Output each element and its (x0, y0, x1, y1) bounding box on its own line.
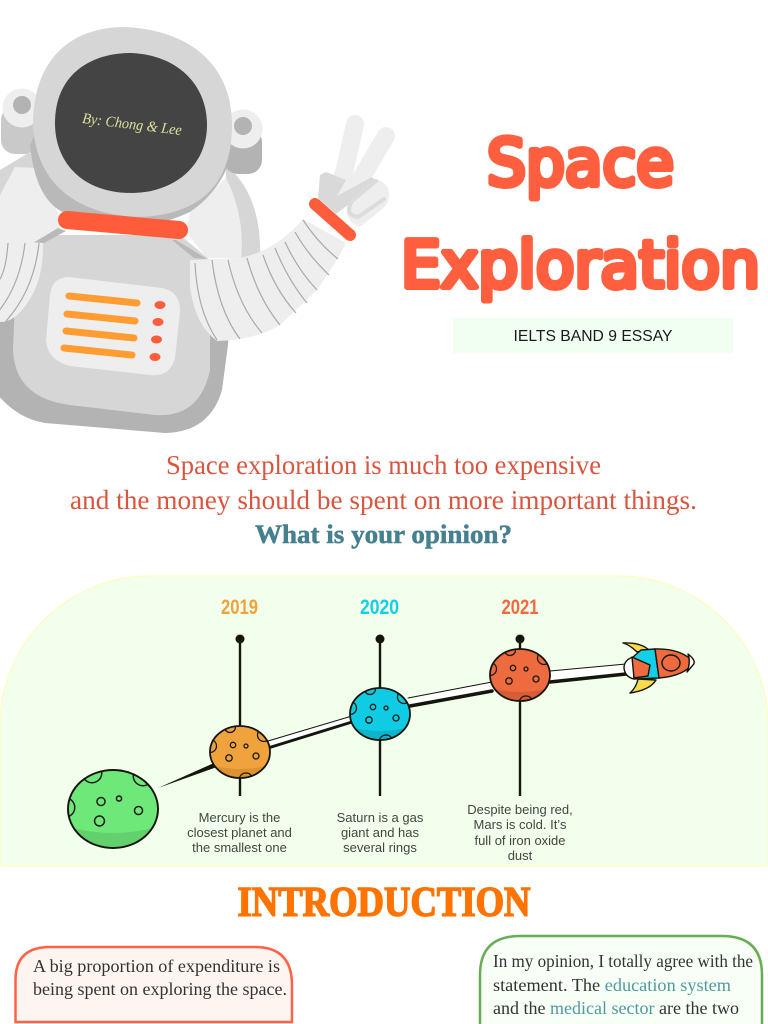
panel: introduction left (16, 947, 292, 1022)
panel: introduction right (480, 936, 762, 1024)
caption: 2019: Mercury is the (199, 810, 280, 825)
astronaut collar (67, 220, 179, 230)
astronaut helmet: By: Chong & Lee (81, 111, 183, 139)
astronaut body (0, 152, 260, 433)
heading: introduction: INTRODUCTION (238, 880, 530, 926)
planet: green (67, 769, 159, 849)
caption: 2020: giant and has (341, 825, 420, 840)
astronaut left arm (0, 240, 43, 322)
panel: introduction left: A big proportion of expenditure is (33, 956, 280, 976)
astronaut illustration (0, 27, 389, 433)
year labels (221, 596, 539, 619)
year labels: 2020 (360, 596, 399, 619)
planet: blue (349, 687, 411, 741)
panel: introduction right: and the medical sector are the two (493, 998, 739, 1018)
title (401, 127, 760, 303)
astronaut right ear cylinder (224, 110, 262, 174)
panel: introduction right: statement. The education system (493, 975, 731, 995)
astronaut helmet (30, 27, 232, 227)
panel: introduction right: In my opinion, I totally agree with the (493, 951, 753, 971)
caption: 2020 (337, 810, 424, 855)
panel: introduction left: being spent on exploring the space. (33, 979, 287, 999)
rocket trail (158, 664, 626, 788)
planet: red (489, 648, 551, 702)
caption: 2020: several rings (343, 840, 417, 855)
caption: 2019: closest planet and (187, 825, 292, 840)
year labels: 2019 (221, 596, 258, 619)
planet: orange (209, 725, 271, 779)
icon: rocket (623, 643, 694, 693)
subtitle badge (453, 318, 733, 353)
caption: 2021: Despite being red, (467, 802, 573, 817)
caption: 2021 (467, 802, 573, 863)
essay question: Space exploration is much too expensive (166, 450, 601, 480)
astronaut hand (318, 124, 389, 227)
year labels: 2021 (502, 596, 539, 619)
subtitle badge: IELTS BAND 9 ESSAY (514, 328, 673, 345)
title: Space (487, 127, 674, 201)
title: Exploration (401, 229, 760, 303)
astronaut right arm (190, 219, 346, 341)
caption: 2021: full of iron oxide (474, 833, 566, 848)
astronaut left ear cylinder (1, 88, 42, 154)
caption: 2021: dust (508, 848, 533, 863)
astronaut wrist band (315, 204, 350, 235)
timeline poles (236, 634, 524, 796)
caption: 2020: Saturn is a gas (337, 810, 424, 825)
essay question (70, 450, 697, 549)
essay question: What is your opinion? (255, 520, 512, 549)
caption: 2019 (187, 810, 292, 855)
astronaut chest panel (46, 277, 180, 375)
caption: 2021: Mars is cold. It’s (474, 817, 567, 832)
panel: timeline (0, 576, 768, 866)
essay question: and the money should be spent on more important things. (70, 485, 697, 515)
caption: 2019: the smallest one (192, 840, 287, 855)
